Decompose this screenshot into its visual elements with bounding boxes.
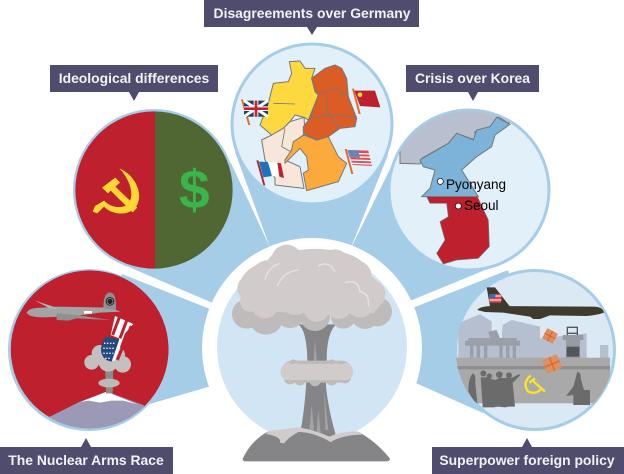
mushroom cloud cap bbox=[232, 245, 392, 335]
heading: The Nuclear Arms Race bbox=[0, 438, 173, 474]
map: American zone bbox=[285, 135, 347, 191]
icon: hammer and sickle bbox=[93, 168, 139, 213]
heading: Ideological differences bbox=[50, 65, 218, 101]
marker: Seoul bbox=[455, 203, 461, 209]
map: China bbox=[400, 111, 510, 164]
ground mound bbox=[243, 427, 390, 461]
bomb in American flag colours bbox=[101, 316, 133, 362]
watch tower bbox=[563, 327, 583, 358]
map: North Korea bbox=[420, 117, 510, 197]
heading: Crisis over Korea: Crisis over Korea bbox=[415, 70, 530, 86]
heading: Ideological differences: Ideological differences bbox=[59, 70, 210, 86]
heading: The Nuclear Arms Race: The Nuclear Arms Race bbox=[8, 452, 164, 468]
map: French zone bbox=[262, 117, 305, 188]
map: British zone bbox=[260, 61, 318, 135]
flag: France bbox=[256, 160, 284, 185]
connector wedges bbox=[89, 124, 535, 413]
heading: Superpower foreign policy: Superpower foreign policy bbox=[439, 452, 615, 468]
mushroom ring cloud bbox=[281, 359, 353, 386]
heading: Crisis over Korea bbox=[406, 65, 539, 101]
panel: crisis over Korea bbox=[389, 103, 549, 270]
label: Seoul: Seoul bbox=[464, 198, 499, 213]
graffiti hammer and sickle bbox=[525, 375, 545, 393]
Brandenburg Gate bbox=[465, 330, 520, 358]
panel: superpower foreign policy bbox=[453, 270, 614, 430]
mountain bbox=[50, 392, 144, 428]
parcels bbox=[542, 328, 562, 374]
bomber plane bbox=[477, 287, 604, 319]
map: South Korea bbox=[427, 197, 489, 264]
icon: dollar sign: $ bbox=[179, 158, 210, 220]
heading: Disagreements over Germany: Disagreements over Germany bbox=[214, 5, 411, 21]
flag: United States bbox=[345, 149, 372, 174]
heading: Superpower foreign policy bbox=[432, 438, 624, 474]
map: Soviet zone bbox=[303, 65, 357, 140]
mountain snow bbox=[81, 392, 137, 404]
panel: disagreements over Germany bbox=[232, 44, 392, 204]
flag: Soviet Union bbox=[352, 89, 380, 114]
marker: Pyonyang bbox=[437, 178, 443, 184]
mushroom explosion bbox=[84, 345, 131, 393]
label: Pyonyang: Pyonyang bbox=[446, 177, 506, 192]
flag: United Kingdom bbox=[241, 99, 268, 125]
panel: ideological differences bbox=[73, 107, 237, 273]
Berlin wall bbox=[453, 358, 610, 403]
buildings bbox=[458, 314, 608, 358]
panel: the nuclear arms race bbox=[10, 270, 169, 430]
heading: Disagreements over Germany bbox=[204, 0, 419, 35]
mushroom stem bbox=[298, 324, 337, 438]
plane bbox=[27, 292, 121, 321]
panel: central mushroom cloud bbox=[202, 238, 422, 461]
silhouettes of people bbox=[468, 370, 590, 407]
